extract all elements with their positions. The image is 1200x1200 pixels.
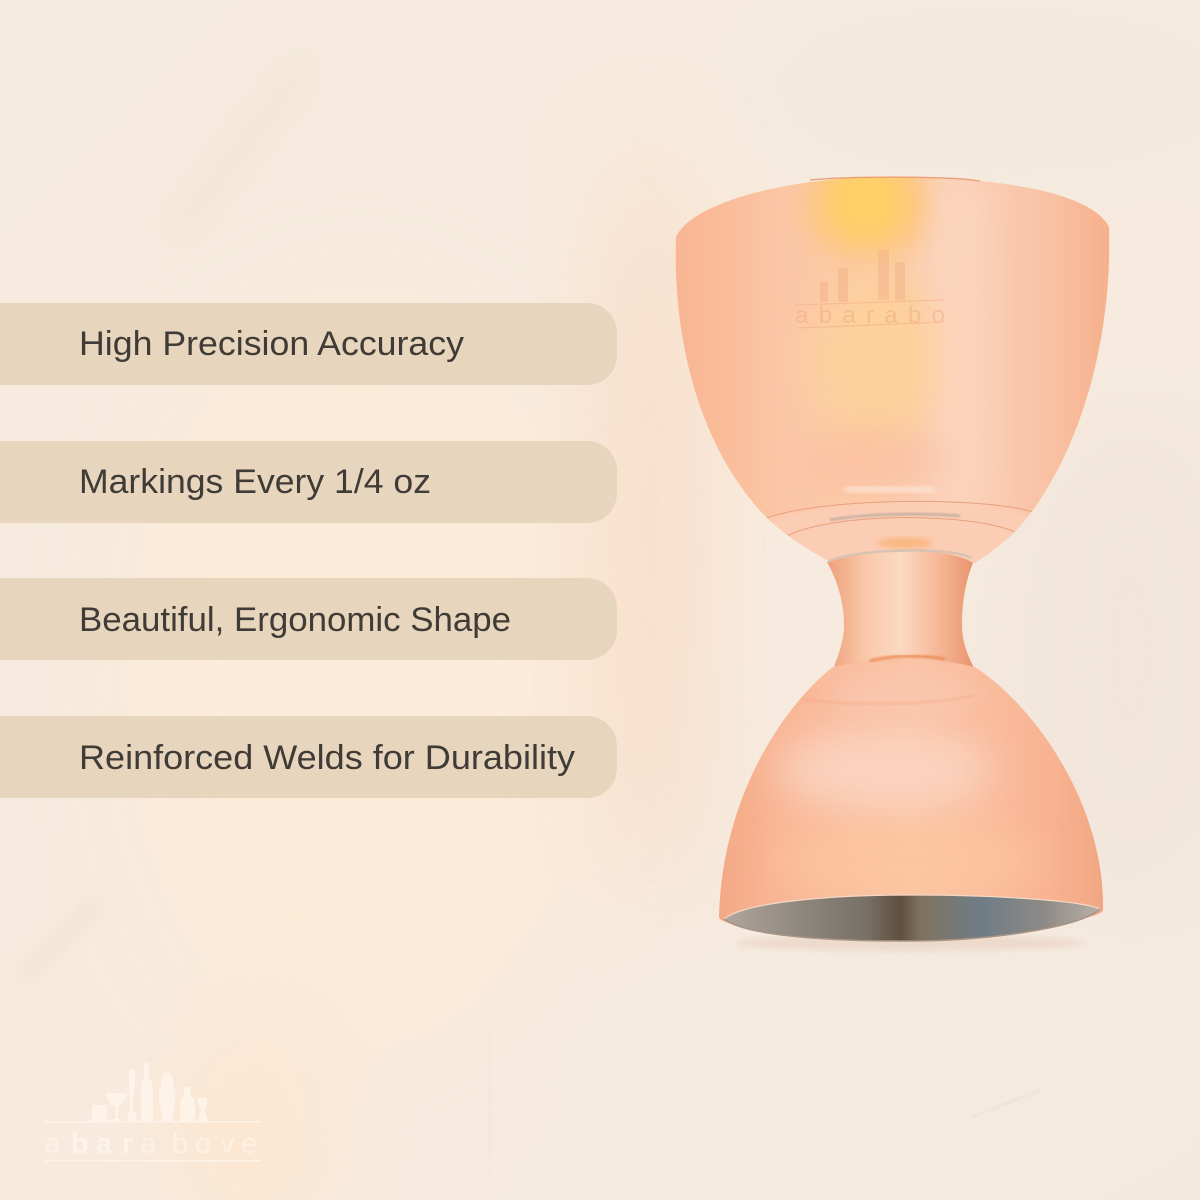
logo: a bar above: e xyxy=(241,1128,257,1160)
logo: a bar above: b xyxy=(172,1128,188,1160)
logo: a bar above: a xyxy=(140,1128,157,1160)
feature pill: High Precision Accuracy: High Precision Accuracy xyxy=(79,325,464,363)
feature pill: Markings Every 1/4 oz xyxy=(0,441,617,523)
icon: bar silhouettes xyxy=(92,1063,208,1121)
etched logo on bowl: abarabo xyxy=(795,302,945,329)
feature pill: Reinforced Welds for Durability: Reinforced Welds for Durability xyxy=(79,739,575,777)
feature pill: Markings Every 1/4 oz: Markings Every 1/4 oz xyxy=(79,463,431,501)
lower bowl xyxy=(719,654,1103,924)
feature pill: Beautiful, Ergonomic Shape xyxy=(0,578,617,660)
logo: a bar above: o xyxy=(195,1128,211,1160)
etched logo on bowl xyxy=(795,250,945,329)
logo: a bar above: b xyxy=(71,1128,89,1160)
feature pill: High Precision Accuracy xyxy=(0,303,617,385)
neck xyxy=(827,550,975,670)
upper bowl xyxy=(676,176,1110,563)
logo: a bar above: a xyxy=(44,1128,61,1160)
feature pill: Reinforced Welds for Durability xyxy=(0,716,617,798)
logo: a bar above xyxy=(44,1063,261,1162)
feature pill: Beautiful, Ergonomic Shape: Beautiful, Ergonomic Shape xyxy=(79,601,511,639)
jigger product photo xyxy=(670,150,1115,951)
inner opening xyxy=(724,895,1100,941)
logo: a bar above: v xyxy=(220,1128,235,1160)
shadow xyxy=(735,935,1085,951)
logo: a bar above: a xyxy=(96,1128,113,1160)
logo: a bar above: r xyxy=(122,1128,133,1160)
